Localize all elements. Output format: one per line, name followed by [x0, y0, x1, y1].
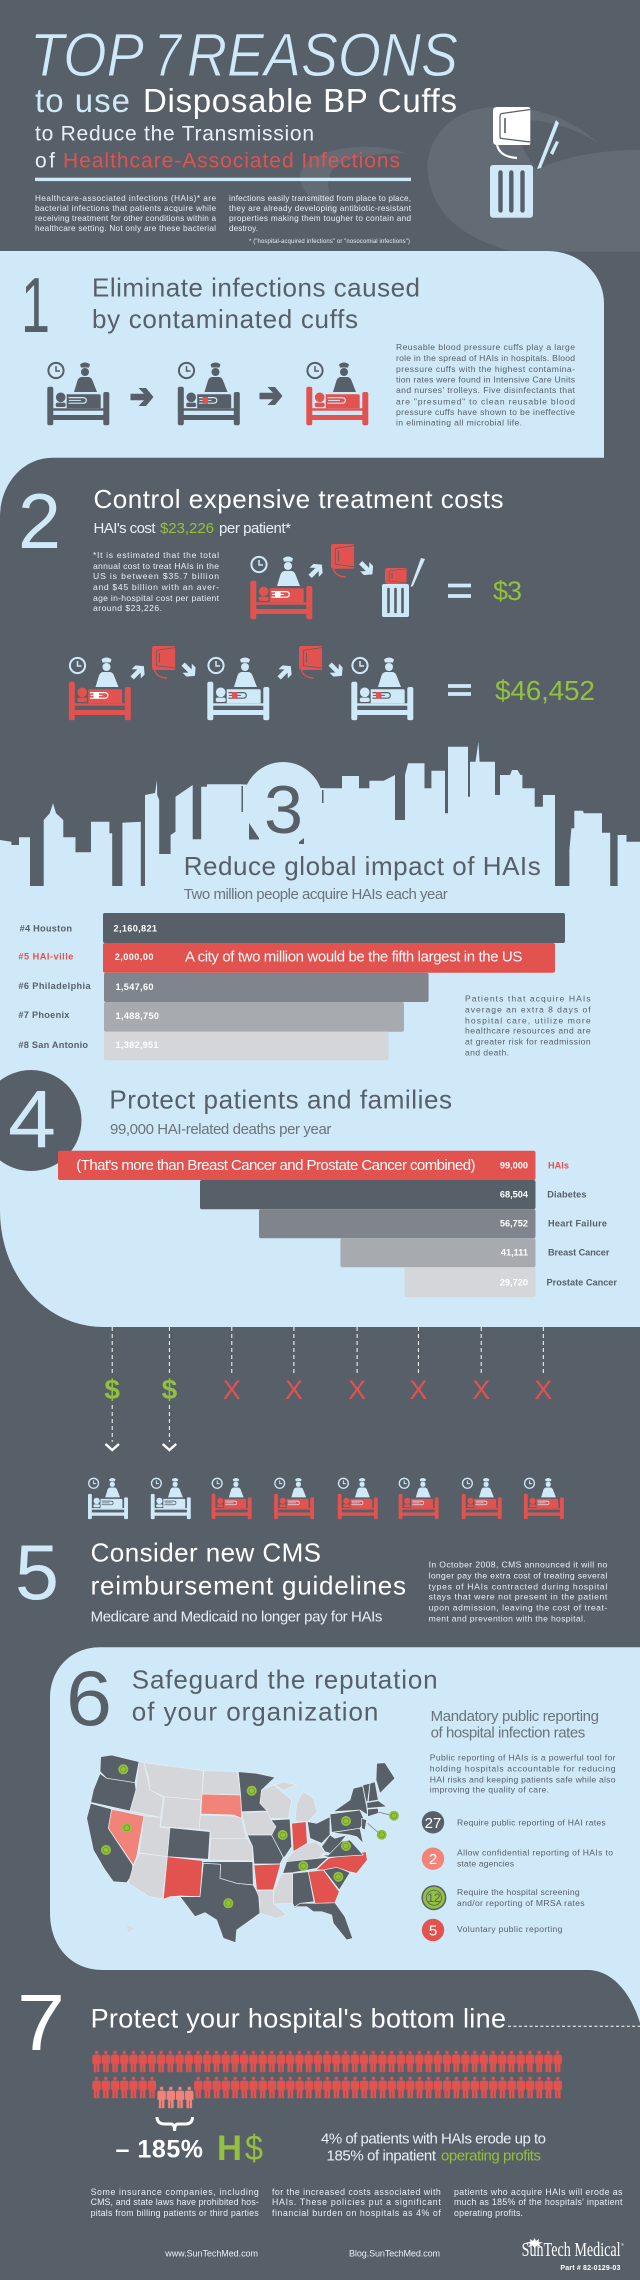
number 4 badge: 4 [8, 1074, 56, 1165]
stat: hospital dollars: $ [245, 2129, 263, 2168]
section 7 text: CMS, and state laws have prohibited hos- [91, 2197, 259, 2207]
bar labels: HAIs [548, 1161, 569, 1171]
section 2 text: US is between $35.7 billion [93, 571, 219, 581]
section 7 text: Some insurance companies, including [91, 2187, 259, 2197]
section 7 text: financial burden on hospitals as 4% of [272, 2208, 441, 2218]
heading 5 [91, 1538, 406, 1600]
section 3 text: hospital care, utilize more [465, 1015, 591, 1025]
section 3 text: and death. [465, 1047, 509, 1057]
stat: hospital dollars [217, 2129, 263, 2168]
bar values: 1,488,750 [116, 1011, 159, 1021]
cost $46,452: $46,452 [495, 675, 595, 706]
panel: section 1 [0, 251, 604, 517]
bar labels: Prostate Cancer [546, 1278, 617, 1288]
legend item: 2 states: state agencies [457, 1859, 514, 1869]
brace [157, 2117, 192, 2131]
icon: infected bed [306, 362, 368, 425]
subtitle line 2: of [35, 150, 55, 173]
heading 5: Consider new CMS [91, 1538, 321, 1568]
stat text [321, 2130, 546, 2165]
section 6 text: Public reporting of HAIs is a powerful tool for [430, 1753, 616, 1763]
bar chart: deaths [58, 1151, 617, 1297]
heading 1: by contaminated cuffs [92, 304, 358, 334]
part number: Part # 82-0129-03 [560, 2265, 620, 2272]
subtitle line 2 [35, 123, 400, 173]
stat: minus 185%: – 185% [116, 2135, 203, 2163]
section 1 text: and nurses' trolleys. Five disinfectants that [396, 385, 576, 395]
section 6 text: HAI risks and keeping patients safe while also [430, 1775, 616, 1785]
people chart [92, 2051, 562, 2108]
bar values: 29,720 [500, 1278, 528, 1288]
bar labels: Breast Cancer [548, 1248, 610, 1258]
subheading 6 [431, 1708, 599, 1742]
section 3 text [465, 994, 591, 1057]
title: TOP [30, 21, 144, 89]
city labels [18, 924, 91, 1050]
bar values: 41,111 [501, 1248, 528, 1258]
bar values [500, 1161, 529, 1288]
legend item: 27 states: 27 [425, 1815, 441, 1832]
section 1 text [396, 342, 576, 428]
dashed payment lines [112, 1327, 543, 1442]
heading 4: Protect patients and families [109, 1084, 452, 1114]
equals [448, 586, 471, 596]
subheading 2 [94, 520, 291, 537]
heading 6: of your organization [132, 1697, 378, 1727]
city labels: #7 Phoenix [18, 1010, 70, 1020]
legend [421, 1811, 613, 1941]
legend item: 2 states [422, 1848, 613, 1870]
header intro text: properties making them tougher to contain and [229, 214, 411, 223]
unpaid crosses: X [534, 1375, 552, 1405]
section 5 text: upon admission, leaving the cost of treat- [429, 1602, 607, 1612]
legend item: 5 states: Voluntary public reporting [457, 1924, 563, 1934]
subheading 2: $23,226 [160, 520, 214, 537]
header intro text: Healthcare-associated infections (HAIs)* are [35, 194, 216, 203]
arrowheads [106, 1444, 176, 1450]
panel: section 6 [50, 1647, 640, 2023]
section 3 text: healthcare resources and are [465, 1025, 591, 1035]
section 4 content [0, 1070, 617, 1297]
paid dollars: $ [162, 1374, 178, 1405]
city labels: #4 Houston [20, 924, 72, 934]
header intro text: they are already developing antibiotic-resistant [229, 204, 412, 213]
legend item: 27 states [422, 1811, 606, 1834]
paid dollars: $ [104, 1374, 120, 1405]
stat text: 185% of inpatient [326, 2148, 437, 2165]
bar chart: city sizes [18, 913, 565, 1060]
subtitle line 1: Disposable BP Cuffs [143, 82, 457, 119]
number 4 badge [0, 1070, 82, 1171]
section 7 text: for the increased costs associated with [272, 2187, 441, 2197]
heading 1: Eliminate infections caused [92, 273, 420, 303]
title [30, 21, 458, 89]
section 5 text: longer pay the extra cost of treating several [429, 1570, 607, 1580]
bar labels: Heart Failure [548, 1219, 607, 1229]
legend item: 2 states: 2 [429, 1851, 437, 1868]
number 1: 1 [21, 261, 50, 349]
footer links: www.SunTechMed.com [164, 2249, 258, 2259]
section 2 text: around $23,226. [93, 603, 162, 613]
city labels: #8 San Antonio [18, 1040, 88, 1050]
section 5 text [429, 1559, 608, 1623]
arrow [130, 388, 154, 406]
heading 7: Protect your hospital's bottom line [91, 2003, 506, 2033]
legend item: 12 states: Require the hospital screening [457, 1887, 580, 1897]
unpaid crosses: X [285, 1375, 303, 1405]
arrow [260, 387, 282, 405]
section 2 text: *It is estimated that the total [93, 550, 219, 560]
paid dollars [104, 1374, 178, 1405]
section 2 text [93, 550, 220, 613]
icon: cuff in trash [490, 107, 559, 218]
header intro text: infections easily transmitted from place to place, [229, 194, 411, 203]
section 3 content [18, 851, 591, 1060]
header intro text: receiving treatment for other conditions within a [35, 214, 216, 223]
subheading 6: Mandatory public reporting [431, 1708, 599, 1725]
row: disposable cuff [250, 544, 425, 619]
header intro text [35, 194, 412, 245]
bar labels [546, 1161, 617, 1288]
heading 6 [132, 1664, 438, 1727]
city labels: #6 Philadelphia [18, 981, 91, 991]
header intro text: healthcare setting. Not only are these bacterial [35, 224, 216, 233]
bar labels: Diabetes [547, 1190, 586, 1200]
map of the United States [87, 1755, 395, 1943]
section 1 text: pressure cuffs with the highest contamina- [396, 364, 575, 374]
legend item: 5 states: 5 [429, 1922, 437, 1940]
bar values: 99,000 [500, 1161, 528, 1171]
heading 1 [92, 273, 420, 334]
title: 7 [154, 21, 183, 89]
panel: header [30, 21, 458, 245]
panel: section 7 [17, 1978, 640, 2272]
section 1 text: tion rates were found in Intensive Care Units [396, 374, 575, 384]
header intro text: destroy. [229, 224, 258, 233]
stat text: operating profits [441, 2148, 541, 2165]
bar values: 68,504 [500, 1190, 529, 1200]
subheading 6: of hospital infection rates [431, 1725, 585, 1742]
row: reusable cuff [69, 646, 413, 720]
subtitle line 1: to use [35, 82, 130, 119]
section 5 text: In October 2008, CMS announced it will no [429, 1559, 608, 1569]
panel: section 3 and 4 with skyline [0, 742, 640, 1327]
section 2 text: annual cost to treat HAIs in the [93, 561, 219, 571]
section 3 number badge: 3 [264, 772, 303, 848]
section 5 text: types of HAIs contracted during hospital [429, 1581, 607, 1591]
bar values: 2,160,821 [114, 923, 157, 933]
legend item: 2 states: Allow confidential reporting of HAIs to [457, 1848, 613, 1858]
number 2: 2 [18, 477, 61, 565]
section 6 text: improving the quality of care. [430, 1785, 549, 1795]
subheading 2: HAI's cost [94, 520, 156, 537]
section 6 text: holding hospitals accountable for reducing [430, 1764, 616, 1774]
legend item: 12 states: 12 [427, 1891, 441, 1905]
section 1 text: pressure cuffs have shown to be ineffective [396, 407, 575, 417]
legend item: 5 states [422, 1919, 563, 1941]
subheading 4: 99,000 HAI-related deaths per year [110, 1121, 331, 1138]
panel: section 5 [15, 1528, 608, 1626]
section 2 text: age in-hospital cost per patient [93, 593, 220, 603]
bar values: 2,000,00 [115, 952, 154, 962]
heading 3: Reduce global impact of HAIs [184, 851, 541, 881]
legend item: 12 states [421, 1885, 584, 1910]
subheading 2: per patient* [219, 520, 291, 537]
section 7 text [91, 2187, 623, 2218]
number 6: 6 [66, 1654, 112, 1742]
number 7: 7 [17, 1978, 65, 2067]
section 2 text: and $45 billion with an aver- [93, 582, 219, 592]
header intro text: bacterial infections that patients acquire while [35, 204, 216, 213]
cost $3: $3 [493, 576, 522, 606]
equals [448, 686, 471, 694]
legend item: 27 states: Require public reporting of HAI rates [457, 1818, 606, 1828]
section 7 text: operating profits. [454, 2208, 523, 2218]
payment symbols [104, 1374, 552, 1405]
heading 5: reimbursement guidelines [91, 1570, 406, 1600]
subtitle line 2: Healthcare-Associated Infections [63, 150, 400, 173]
map markers [101, 1764, 399, 1908]
section 1 text: role in the spread of HAIs in hospitals. Blood [396, 353, 575, 363]
heading 6: Safeguard the reputation [132, 1664, 438, 1694]
heading 2: Control expensive treatment costs [94, 484, 504, 514]
icon: contaminated cuff bed [178, 362, 240, 425]
title: REASONS [187, 21, 458, 89]
section 5 text: ment and prevention with the hospital. [429, 1613, 586, 1623]
bar values: 1,547,60 [116, 982, 154, 992]
icon: clean bed [47, 362, 109, 425]
subtitle line 2: to Reduce the Transmission [35, 123, 314, 146]
bar callout: (That's more than Breast Cancer and Prostate Cancer combined) [76, 1157, 476, 1174]
footer links: Blog.SunTechMed.com [349, 2249, 440, 2259]
unpaid crosses: X [409, 1375, 427, 1405]
row of beds [88, 1478, 564, 1519]
number 5: 5 [15, 1528, 59, 1616]
section 6 text [430, 1753, 616, 1795]
unpaid crosses: X [223, 1375, 241, 1405]
unpaid crosses: X [348, 1375, 366, 1405]
section 5 text: stays that were not present in the patient [429, 1591, 608, 1601]
legend item: 12 states: and/or reporting of MRSA rates [457, 1898, 584, 1908]
city labels: #5 HAI-ville [18, 951, 73, 961]
bar values: 1,382,951 [116, 1040, 158, 1050]
header intro text: * ("hospital-acquired infections" or "nosocomial infections") [249, 239, 410, 245]
logo: ® [621, 2242, 624, 2247]
section 1 text: in eliminating all microbial life. [396, 418, 522, 428]
subheading 3: Two million people acquire HAIs each year [184, 886, 448, 903]
background swirl [300, 107, 640, 330]
bar values: 56,752 [500, 1219, 528, 1229]
bar values [114, 923, 159, 1050]
subheading 5: Medicare and Medicaid no longer pay for HAIs [91, 1609, 382, 1626]
unpaid crosses [223, 1375, 552, 1405]
section 7 text: HAIs. These policies put a significant [272, 2197, 441, 2207]
section 7 text: patients who acquire HAIs will erode as [454, 2187, 623, 2197]
section 7 text: pitals from billing patients or third parties [91, 2208, 259, 2218]
section 1 text: are "presumed" to clean reusable blood [396, 396, 575, 406]
section 3 text: average an extra 8 days of [465, 1005, 591, 1015]
stat text: 4% of patients with HAIs erode up to [321, 2130, 546, 2147]
dotted line [508, 2025, 640, 2027]
section 3 text: at greater risk for readmission [465, 1036, 591, 1046]
bar callout: A city of two million would be the fifth largest in the US [185, 949, 522, 966]
section 3 number badge [242, 762, 324, 848]
section 1 text: Reusable blood pressure cuffs play a large [396, 342, 575, 352]
section 3 text: Patients that acquire HAIs [465, 994, 591, 1004]
section 7 text: much as 185% of the hospitals' inpatient [454, 2197, 623, 2207]
unpaid crosses: X [472, 1375, 490, 1405]
stat: hospital dollars: H [217, 2129, 242, 2168]
footer links [164, 2249, 440, 2259]
panel: section 2 [18, 477, 595, 720]
